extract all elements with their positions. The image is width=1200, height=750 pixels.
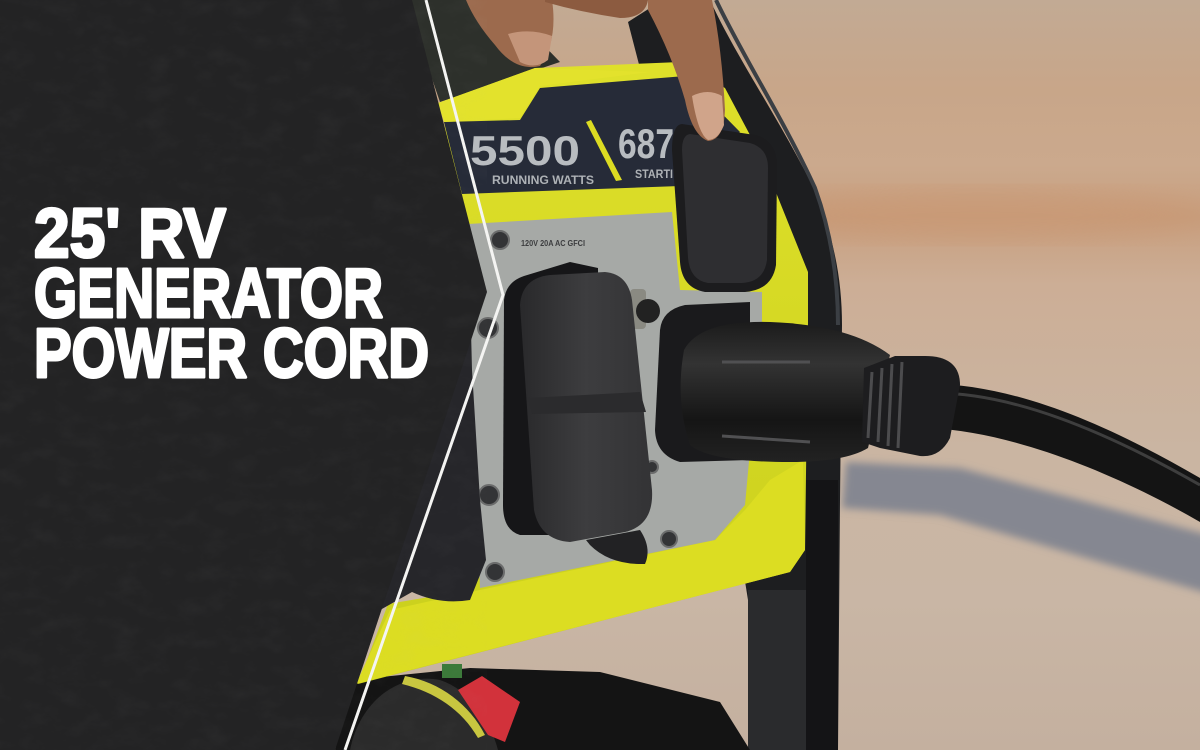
dark label plate: STARTI xyxy=(635,167,673,181)
panel screws xyxy=(478,231,677,581)
yellow handle lip xyxy=(438,68,650,122)
title: GENERATOR xyxy=(34,254,383,332)
label: running watts: 5500 xyxy=(470,127,580,174)
finger and hand xyxy=(466,0,725,141)
bottom machinery xyxy=(335,664,750,750)
title: 25' RV xyxy=(34,194,226,272)
label: starting watts: 687 xyxy=(618,120,674,167)
dark label plate: RUNNING WATTS xyxy=(492,173,594,187)
dark housing back at upper left xyxy=(405,0,560,102)
closed outlet cover xyxy=(503,262,652,564)
dark title panel xyxy=(0,0,487,750)
panel small text: 120V 20A AC GFCI xyxy=(521,239,585,248)
open outlet cover upper right xyxy=(672,124,777,292)
title xyxy=(34,194,429,392)
title: POWER CORD xyxy=(34,314,429,392)
generator yellow housing xyxy=(356,62,808,684)
dark label plate xyxy=(444,76,740,194)
reset button xyxy=(630,289,660,329)
cast shadow on ground xyxy=(842,462,1200,620)
left side cover behind divider xyxy=(380,290,486,610)
power cord xyxy=(930,384,1200,522)
white chevron line xyxy=(345,0,503,750)
grey control panel xyxy=(468,212,762,588)
twist-lock plug xyxy=(655,302,960,462)
generator frame tube xyxy=(628,0,842,750)
